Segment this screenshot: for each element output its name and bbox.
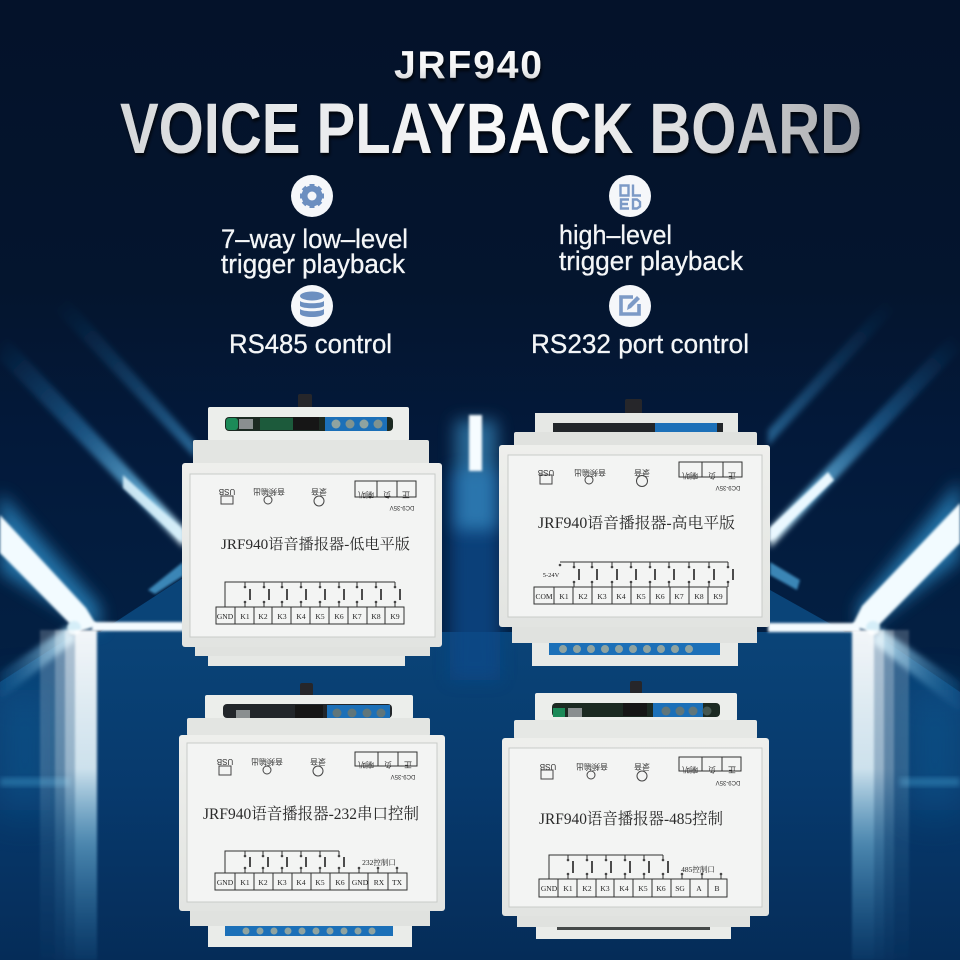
terminal labels: K5 xyxy=(636,592,646,601)
label sticker xyxy=(187,743,437,902)
board name: JRF940语音播报器-485控制 xyxy=(539,809,723,828)
device: RS232 board xyxy=(179,683,445,947)
terminal labels: K1 xyxy=(240,878,250,887)
label: high-level trigger playback: trigger playback xyxy=(559,246,743,276)
terminal labels xyxy=(539,879,727,897)
terminal labels: GND xyxy=(352,878,369,887)
icon: database xyxy=(291,285,333,327)
icon: edit xyxy=(609,285,651,327)
terminal labels: K4 xyxy=(619,884,629,893)
device: RS485 board xyxy=(502,681,769,939)
background: right light beams xyxy=(768,300,960,960)
terminal labels: K3 xyxy=(600,884,610,893)
front cover xyxy=(499,445,770,627)
terminal labels: B xyxy=(714,884,720,893)
terminal labels: GND xyxy=(217,612,234,621)
terminal labels: K2 xyxy=(578,592,588,601)
port markings: 音频输出 xyxy=(253,487,285,497)
board name: JRF940语音播报器-低电平版 xyxy=(221,535,410,553)
icon: OLED xyxy=(609,175,651,217)
port markings: 录音 xyxy=(634,468,650,478)
wiring diagram xyxy=(549,855,721,879)
wiring diagram xyxy=(225,582,400,607)
background: left light beams xyxy=(0,290,195,960)
port markings: USB xyxy=(538,468,554,477)
terminal labels: K5 xyxy=(315,612,325,621)
port label: 485控制口 xyxy=(681,864,715,874)
feature: high-level trigger xyxy=(559,175,743,276)
front cover xyxy=(179,735,445,911)
top housing with PCB window xyxy=(535,693,737,721)
port markings: 正 xyxy=(402,490,410,499)
port markings: 录音 xyxy=(311,487,327,497)
terminal labels: K2 xyxy=(258,878,268,887)
port markings: DC9-35V xyxy=(716,779,740,785)
lower tier with terminals xyxy=(512,625,757,666)
label: 7-way low-level trigger playback: trigger playback xyxy=(221,249,405,279)
port markings: DC9-35V xyxy=(391,773,415,779)
port markings: 负 xyxy=(708,765,716,775)
label: RS485 control: RS485 control xyxy=(229,329,392,359)
terminal labels: K8 xyxy=(694,592,704,601)
port markings: 音频输出 xyxy=(251,757,283,767)
label: 7-way low-level trigger playback: 7–way low–level xyxy=(221,224,408,254)
label sticker xyxy=(508,455,762,617)
knob xyxy=(625,399,642,414)
subtitle: JRF940: JRF940 xyxy=(394,44,542,87)
port label: 232控制口 xyxy=(362,857,396,867)
port markings: 录音 xyxy=(310,757,326,767)
terminal labels: K1 xyxy=(559,592,569,601)
port markings: 喇叭 xyxy=(682,765,698,775)
lower tier xyxy=(195,645,430,666)
terminal labels: TX xyxy=(392,878,403,887)
port markings: 喇叭 xyxy=(358,760,374,770)
label sticker xyxy=(509,748,762,907)
background: blue floor xyxy=(0,632,960,960)
port markings: 正 xyxy=(404,760,412,769)
terminal labels: K1 xyxy=(240,612,250,621)
icon: gear xyxy=(291,175,333,217)
terminal labels: K6 xyxy=(656,884,666,893)
terminal labels xyxy=(215,873,407,890)
upper tier xyxy=(187,718,430,736)
wiring diagram xyxy=(560,562,733,587)
terminal labels: K3 xyxy=(597,592,607,601)
port markings: DC9-35V xyxy=(390,504,414,510)
terminal labels: K4 xyxy=(296,612,306,621)
board name: JRF940语音播报器-高电平版 xyxy=(538,513,736,532)
front cover xyxy=(502,738,769,916)
port markings: USB xyxy=(217,757,233,766)
terminal labels: RX xyxy=(374,878,385,887)
port markings: 正 xyxy=(728,765,736,774)
voltage label: 5-24V xyxy=(543,572,560,579)
board name: JRF940语音播报器-232串口控制 xyxy=(203,804,419,823)
terminal labels: GND xyxy=(217,878,234,887)
port markings: 音频输出 xyxy=(574,468,606,478)
terminal labels: K3 xyxy=(277,612,287,621)
terminal labels: K8 xyxy=(371,612,381,621)
terminal labels: K6 xyxy=(335,878,345,887)
port markings: 音频输出 xyxy=(576,762,608,772)
terminal labels: K6 xyxy=(655,592,665,601)
label sticker xyxy=(190,474,435,637)
terminal labels: COM xyxy=(535,592,553,601)
lower tier xyxy=(517,915,750,939)
knob xyxy=(630,681,642,694)
port markings xyxy=(540,757,741,785)
terminal labels: K4 xyxy=(616,592,626,601)
terminal labels: K2 xyxy=(258,612,268,621)
port markings: USB xyxy=(219,487,235,496)
terminal labels: K9 xyxy=(390,612,400,621)
terminal labels: SG xyxy=(675,884,685,893)
upper tier xyxy=(514,432,757,447)
terminal labels: K1 xyxy=(563,884,573,893)
terminal labels: K9 xyxy=(713,592,723,601)
terminal labels: K4 xyxy=(296,878,306,887)
port markings: DC9-35V xyxy=(716,484,740,490)
port markings: 负 xyxy=(383,490,391,500)
port markings: 喇叭 xyxy=(682,471,698,481)
device: high-level board xyxy=(499,399,770,666)
feature: RS232 port control xyxy=(531,285,749,359)
terminal labels: K3 xyxy=(277,878,287,887)
terminal labels xyxy=(534,587,727,604)
port markings xyxy=(219,481,416,510)
upper tier xyxy=(193,440,429,465)
lower tier with terminals xyxy=(190,909,430,947)
label: RS232 port control: RS232 port control xyxy=(531,329,749,359)
feature: RS485 control xyxy=(229,285,392,359)
front cover xyxy=(182,463,442,647)
upper tier xyxy=(514,720,757,739)
terminal labels xyxy=(216,607,404,624)
wiring diagram xyxy=(225,851,397,873)
port markings: USB xyxy=(540,762,556,771)
label: high-level trigger playback xyxy=(559,220,743,276)
port markings: 负 xyxy=(708,471,716,481)
terminal labels: K7 xyxy=(352,612,362,621)
device: low-level board xyxy=(182,394,442,666)
top housing with PCB window xyxy=(205,695,413,719)
background: centre light column xyxy=(450,415,500,680)
terminal labels: K5 xyxy=(315,878,325,887)
knob xyxy=(298,394,312,408)
terminal labels: K5 xyxy=(638,884,648,893)
port markings: 录音 xyxy=(634,762,650,772)
port markings xyxy=(538,462,742,490)
terminal labels: K7 xyxy=(674,592,684,601)
port markings: 负 xyxy=(384,760,392,770)
terminal labels: K2 xyxy=(582,884,592,893)
feature: low-level trigger xyxy=(221,175,408,279)
terminal labels: K6 xyxy=(334,612,344,621)
port markings: 正 xyxy=(728,471,736,480)
knob xyxy=(300,683,313,696)
port markings xyxy=(217,752,417,779)
port markings: 喇叭 xyxy=(358,490,374,500)
top housing with PCB window xyxy=(535,413,738,433)
label: 7-way low-level trigger playback xyxy=(221,224,408,279)
terminal labels: GND xyxy=(541,884,558,893)
terminal labels: A xyxy=(696,884,702,893)
label: high-level trigger playback: high–level xyxy=(559,220,672,250)
top housing with PCB window xyxy=(208,407,409,441)
